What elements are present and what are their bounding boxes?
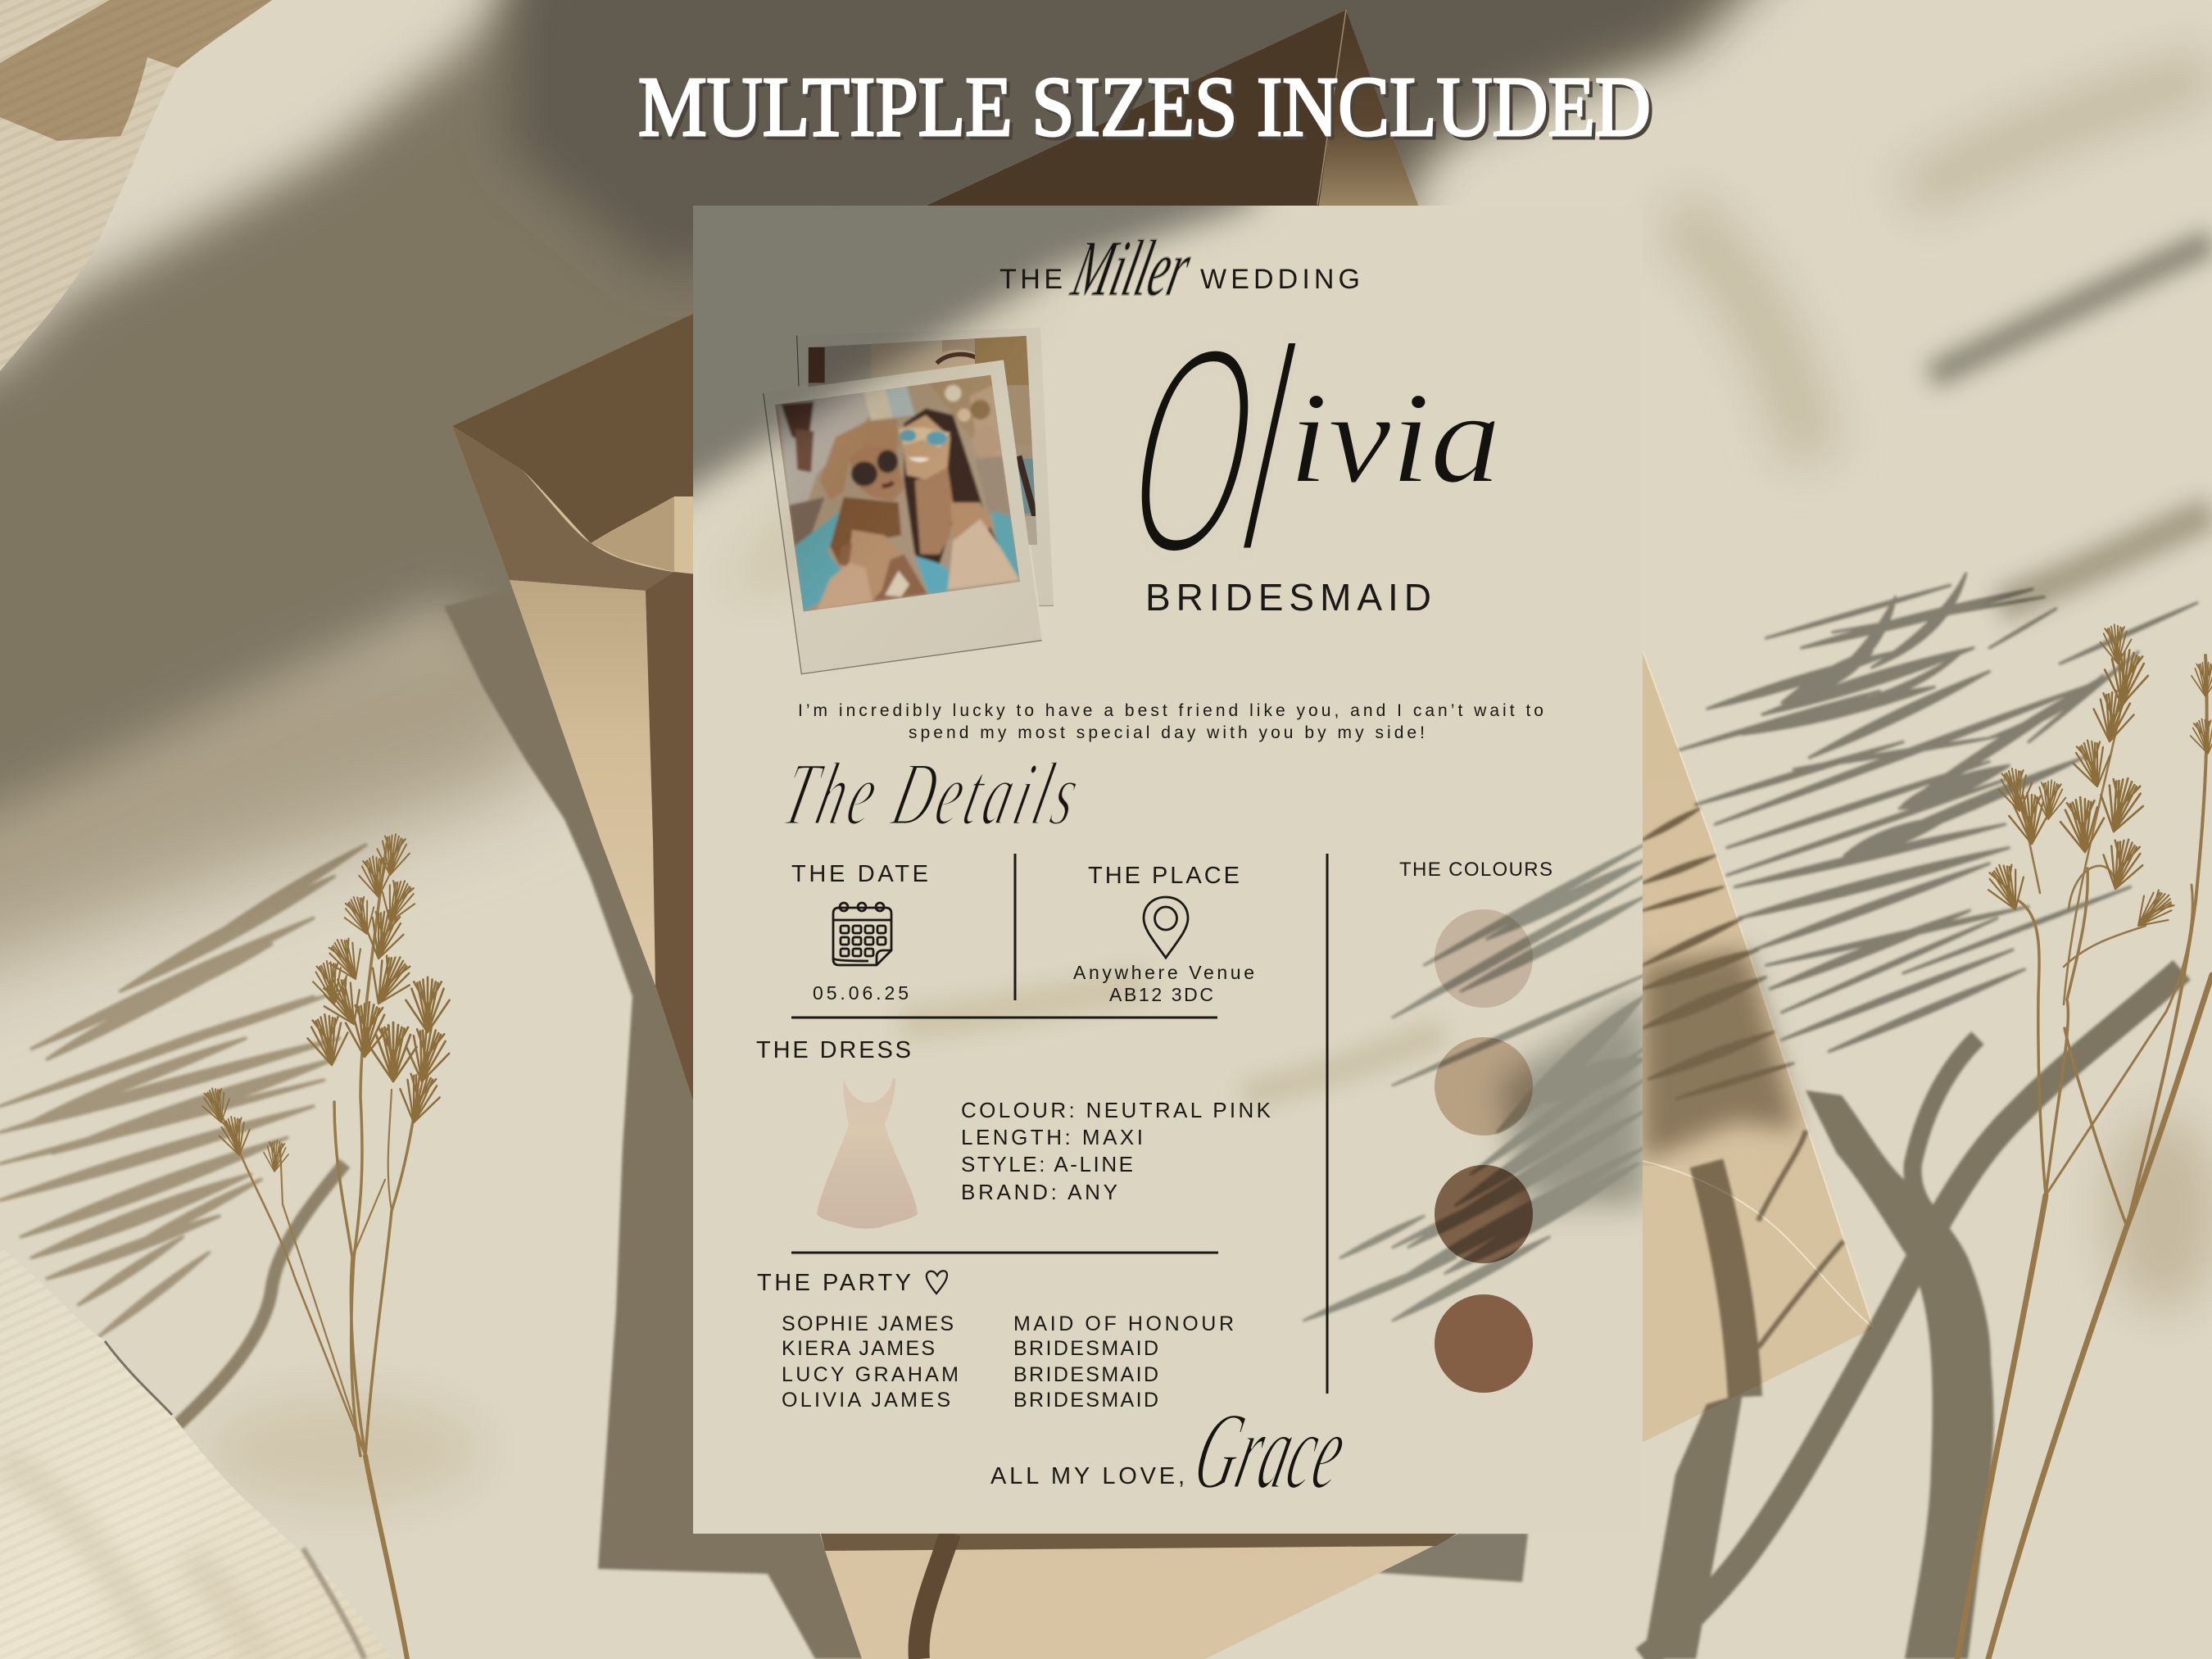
- section: the place: AB12 3DC: [1109, 984, 1213, 1005]
- photo: two friends selfie: [773, 371, 1024, 614]
- recipient name: Olivia: O: [1114, 284, 1271, 618]
- section label: the colours: THE COLOURS: [1399, 859, 1552, 881]
- section: the party: [757, 1270, 1234, 1412]
- section: the date: 05.06.25: [813, 982, 909, 1004]
- background: top left cloth: [0, 0, 272, 371]
- sign-off: ALL MY LOVE,: [990, 1463, 1185, 1489]
- text: ivia: [1289, 365, 1501, 510]
- title: MULTIPLE SIZES INCLUDED: [638, 60, 1651, 154]
- message text: spend my most special day with you by my side!: [909, 723, 1425, 742]
- section: the party: BRIDESMAID: [1013, 1337, 1158, 1360]
- shadows falling on card: [693, 206, 1643, 1323]
- section: the place: [1073, 863, 1254, 1005]
- photo: front polaroid: [764, 360, 1042, 674]
- title: MULTIPLE SIZES INCLUDED: [641, 63, 1654, 157]
- section: the place: THE PLACE: [1088, 863, 1240, 889]
- card heading: the miller wedding: [999, 224, 1360, 313]
- message text: [798, 701, 1543, 742]
- section: the place: Anywhere Venue: [1073, 962, 1254, 983]
- swatch: colour 4: [1435, 1294, 1533, 1393]
- arms and clothes: [950, 502, 991, 543]
- section: the date: [791, 861, 928, 1004]
- envelope flap: [452, 314, 693, 543]
- photo: back polaroid: [797, 328, 1054, 605]
- card heading: the miller wedding: Miller: [1064, 224, 1199, 313]
- shadow: stems bottom right: [1643, 970, 2182, 1659]
- section: the party: BRIDESMAID: [1013, 1363, 1158, 1386]
- bottom left cloth: [0, 1247, 392, 1659]
- section: the party: THE PARTY: [757, 1270, 911, 1296]
- icon: heart: [927, 1271, 947, 1294]
- card heading: the miller wedding: THE: [999, 264, 1063, 295]
- section: the date: THE DATE: [791, 861, 928, 887]
- section: the dress: [756, 1037, 1271, 1204]
- section: the dress: STYLE: A-LINE: [961, 1152, 1133, 1176]
- swatch: colour 1: [1435, 909, 1533, 1008]
- message text: I’m incredibly lucky to have a best friend like you, and I can’t wait to: [798, 701, 1543, 720]
- panel: invitation card: [693, 206, 1643, 1534]
- section: the party: KIERA JAMES: [782, 1337, 935, 1360]
- section: the dress: BRAND: ANY: [961, 1180, 1117, 1204]
- section: the party: BRIDESMAID: [1013, 1389, 1158, 1412]
- section: the party: OLIVIA JAMES: [782, 1389, 950, 1412]
- section: the party: SOPHIE JAMES: [782, 1312, 954, 1335]
- section: the party: MAID OF HONOUR: [1013, 1312, 1234, 1335]
- recipient name: Olivia: l: [1229, 284, 1303, 618]
- icon: location pin: [1144, 897, 1188, 958]
- swatch: colour 2: [1435, 1037, 1533, 1135]
- section: the dress: COLOUR: NEUTRAL PINK: [961, 1098, 1271, 1122]
- sign-off: Grace: [1184, 1389, 1358, 1512]
- section: the party: LUCY GRAHAM: [782, 1363, 959, 1386]
- section: the dress: THE DRESS: [756, 1037, 911, 1063]
- dividers: [791, 854, 1327, 1394]
- card heading: the miller wedding: WEDDING: [1200, 264, 1360, 295]
- icon: right dried plant: [1957, 623, 2212, 1659]
- heading: the details: The Details: [773, 745, 1088, 845]
- sign-off: [990, 1389, 1358, 1512]
- recipient name: Olivia: [1114, 284, 1501, 618]
- shadow: right plant: [1643, 573, 2197, 1161]
- friend left: [830, 497, 901, 568]
- shadow: left plant: [0, 845, 365, 1425]
- icon: calendar: [833, 903, 891, 965]
- icon: left dried plant: [198, 832, 453, 1659]
- friend right: [903, 407, 999, 565]
- icon: dress: [817, 1078, 918, 1229]
- role label: BRIDESMAID: [1145, 576, 1431, 619]
- swatch: colour 3: [1435, 1165, 1533, 1263]
- envelope: [452, 10, 1874, 1659]
- section: the dress: LENGTH: MAXI: [961, 1125, 1143, 1149]
